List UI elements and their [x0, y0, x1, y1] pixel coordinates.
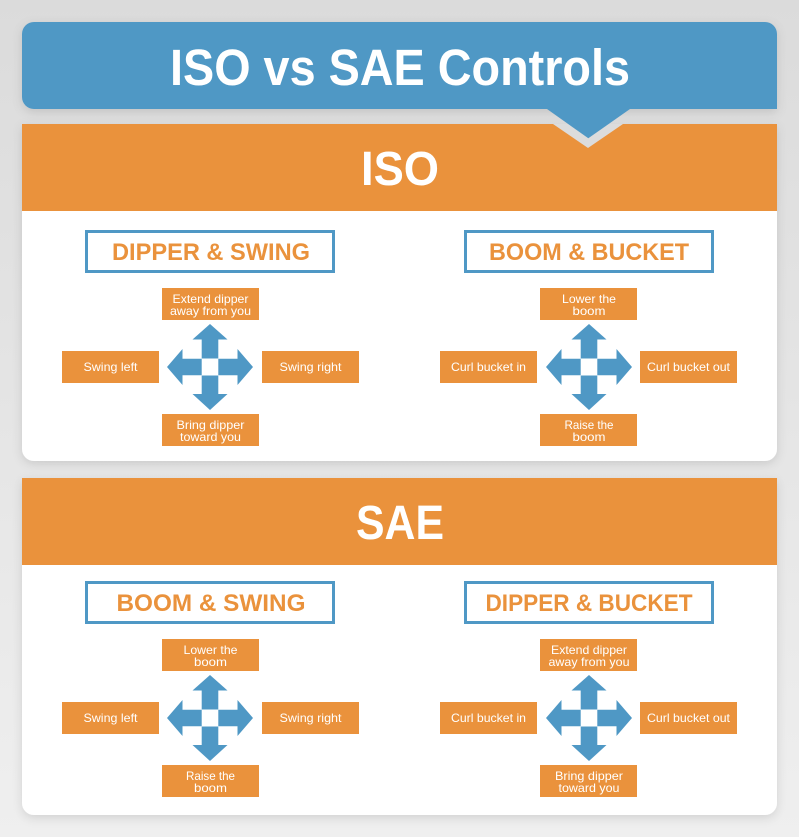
heading: dipper and bucket: DIPPER & BUCKET	[486, 590, 693, 617]
label: curl bucket in	[440, 351, 537, 383]
icon: four-way arrows	[167, 675, 253, 761]
heading: boom and bucket	[466, 232, 712, 272]
label: lower the boom	[540, 288, 637, 320]
label: bring dipper: toward you	[558, 781, 620, 795]
label: lower the boom: boom	[572, 304, 606, 318]
pointer gap	[553, 124, 623, 148]
label: raise the boom	[162, 765, 259, 797]
control group: boom and swing	[62, 582, 359, 797]
label: swing left: Swing left	[84, 711, 138, 725]
control group: dipper and bucket	[440, 582, 737, 797]
control group: dipper and swing	[62, 232, 359, 446]
heading: boom and bucket: BOOM & BUCKET	[489, 239, 689, 266]
heading: dipper and bucket	[466, 582, 712, 622]
label: raise the boom: Raise the	[564, 418, 614, 432]
heading: dipper and swing	[86, 232, 334, 272]
heading: boom and swing	[86, 582, 334, 622]
label: raise the boom	[540, 414, 637, 446]
label: swing right	[262, 702, 359, 734]
label: bring dipper: Bring dipper	[555, 769, 623, 783]
icon: four-way arrows	[546, 324, 632, 410]
label: raise the boom: boom	[194, 781, 227, 795]
label: curl bucket in: Curl bucket in	[451, 711, 526, 725]
label: lower the boom: Lower the	[562, 292, 616, 306]
label: curl bucket out	[640, 351, 737, 383]
panel background: ISO	[22, 124, 777, 461]
label: bring dipper: toward you	[180, 430, 241, 444]
label: lower the boom: boom	[194, 655, 227, 669]
header band: ISO	[22, 124, 777, 211]
label: lower the boom: Lower the	[184, 643, 238, 657]
label: swing right: Swing right	[280, 711, 342, 725]
label: curl bucket in: Curl bucket in	[451, 360, 526, 374]
label: swing left	[62, 702, 159, 734]
label: extend dipper: away from you	[548, 655, 630, 669]
label: curl bucket out: Curl bucket out	[647, 360, 731, 374]
heading: dipper and swing: DIPPER & SWING	[112, 239, 310, 266]
label: curl bucket in	[440, 702, 537, 734]
header band: ISO: ISO	[361, 143, 439, 196]
pointer	[547, 108, 630, 138]
icon: four-way arrows	[167, 324, 253, 410]
label: extend dipper: away from you	[170, 304, 251, 318]
panel: SAE	[22, 478, 777, 815]
label: curl bucket out	[640, 702, 737, 734]
label: swing left	[62, 351, 159, 383]
label: extend dipper: Extend dipper	[551, 643, 627, 657]
panel: ISO	[22, 124, 777, 461]
label: extend dipper	[540, 639, 637, 671]
label: swing right: Swing right	[280, 360, 342, 374]
label: raise the boom: Raise the	[186, 769, 235, 783]
icon: four-way arrows	[546, 675, 632, 761]
label: swing right	[262, 351, 359, 383]
label: lower the boom	[162, 639, 259, 671]
label: extend dipper: Extend dipper	[172, 292, 248, 306]
heading: boom and swing: BOOM & SWING	[116, 590, 306, 617]
title: ISO vs SAE Controls	[170, 39, 630, 96]
label: swing left: Swing left	[84, 360, 138, 374]
control group: boom and bucket	[440, 232, 737, 446]
label: extend dipper	[162, 288, 259, 320]
label: raise the boom: boom	[572, 430, 606, 444]
panel background: SAE	[22, 478, 777, 815]
label: curl bucket out: Curl bucket out	[647, 711, 731, 725]
banner shape	[22, 22, 777, 109]
header band: SAE	[22, 478, 777, 565]
header band: SAE: SAE	[356, 497, 444, 550]
label: bring dipper	[162, 414, 259, 446]
label: bring dipper	[540, 765, 637, 797]
label: bring dipper: Bring dipper	[176, 418, 244, 432]
title banner	[22, 22, 777, 148]
